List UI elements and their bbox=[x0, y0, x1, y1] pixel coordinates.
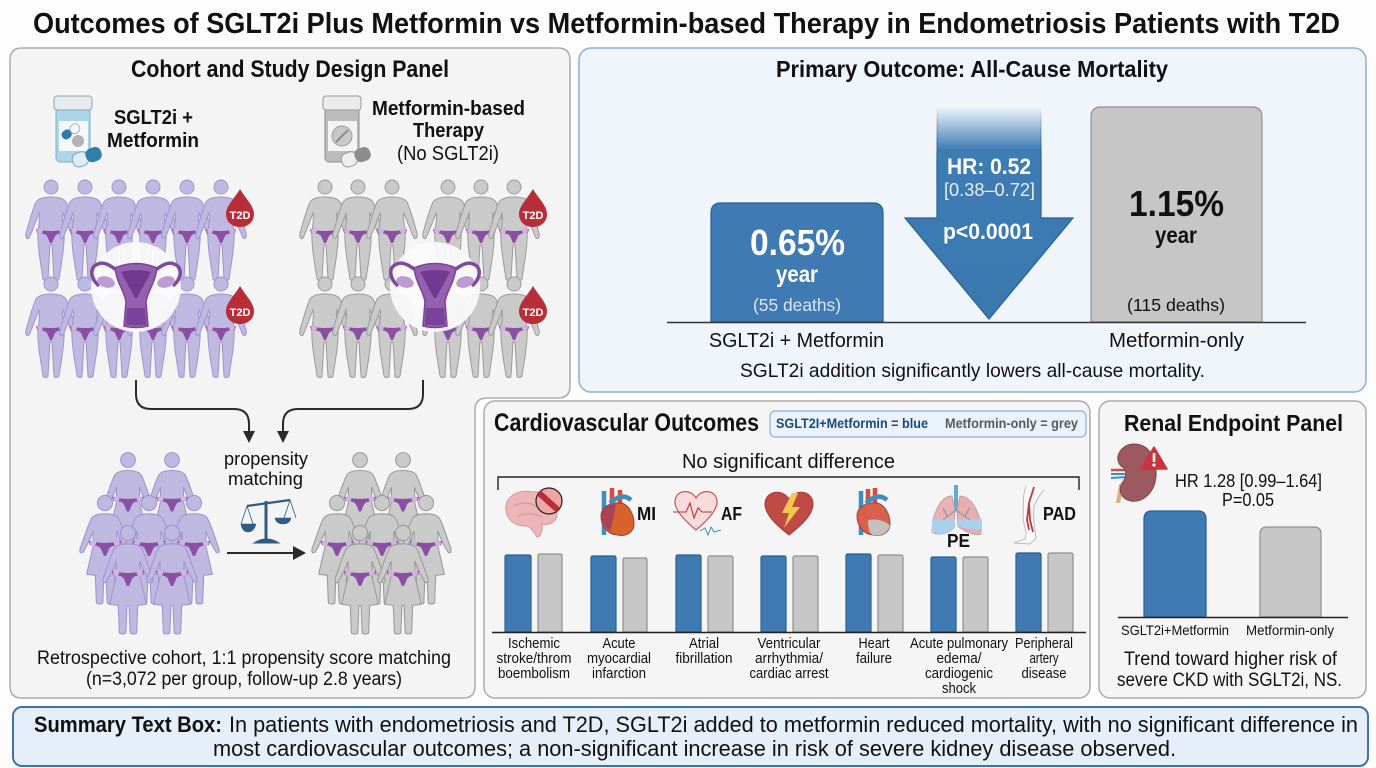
label: SGLT2i + Metformin: Metformin bbox=[107, 130, 199, 152]
icon: metformin pill bottle bbox=[323, 96, 372, 169]
arrow: left cohort to matching bbox=[136, 380, 255, 443]
icon: T2D drop bbox=[519, 286, 547, 324]
icon: heart AF bbox=[673, 492, 721, 535]
icon: T2D drop bbox=[226, 286, 254, 324]
bar: SGLT2i plus metformin: year bbox=[776, 261, 818, 287]
bar: SGLT2i plus metformin: (55 deaths) bbox=[753, 295, 841, 315]
labels: cardiovascular categories: Acute bbox=[602, 636, 636, 652]
label: SGLT2i + Metformin: SGLT2i + bbox=[114, 107, 193, 129]
labels: cardiovascular categories: stroke/throm bbox=[496, 651, 572, 667]
bar: metformin only bbox=[1091, 107, 1262, 322]
labels: cardiovascular categories: shock bbox=[942, 681, 977, 697]
label: propensity matching bbox=[224, 448, 309, 489]
label: PAD: PAD bbox=[1043, 504, 1076, 524]
label: SGLT2i + Metformin axis: SGLT2i + Metformin bbox=[709, 329, 884, 352]
icon: leg artery bbox=[1014, 486, 1044, 544]
heading: renal: Renal Endpoint Panel bbox=[1124, 410, 1343, 436]
icon: heart with lightning bbox=[765, 492, 813, 535]
labels: cardiovascular categories: myocardial bbox=[587, 651, 651, 667]
labels: cardiovascular categories: Acute pulmonary bbox=[910, 636, 1009, 652]
label: Metformin-based Therapy: Therapy bbox=[413, 120, 485, 142]
labels: cardiovascular categories: cardiogenic bbox=[925, 666, 993, 682]
label: propensity matching: propensity bbox=[224, 448, 309, 469]
labels: cardiovascular categories: edema/ bbox=[936, 651, 982, 667]
text: renal conclusion: Trend toward higher risk of bbox=[1124, 649, 1338, 670]
text: cohort description: (n=3,072 per group, follow-up 2.8 years) bbox=[86, 669, 402, 690]
text: renal hazard ratio bbox=[1175, 471, 1322, 510]
labels: cardiovascular categories: Peripheral bbox=[1015, 636, 1073, 652]
panel: cohort and study design bbox=[10, 48, 570, 698]
label: PE: PE bbox=[947, 531, 970, 551]
labels: cardiovascular categories: boembolism bbox=[498, 666, 570, 682]
chart: renal bars bbox=[1118, 511, 1348, 618]
panel: summary text box bbox=[13, 707, 1368, 766]
group: matched metformin patients bbox=[312, 453, 451, 634]
panel: summary text box: most cardiovascular outcomes; a non-significant increase in risk of severe kidney disease observed. bbox=[213, 736, 1176, 761]
heading: cohort panel: Cohort and Study Design Panel bbox=[131, 56, 449, 83]
text: cohort description bbox=[37, 648, 451, 690]
icon: balance scale bbox=[241, 500, 296, 543]
bar: metformin only: 1.15% bbox=[1129, 183, 1224, 224]
panel: cardiovascular outcomes bbox=[484, 401, 1090, 698]
bar: metformin only: (115 deaths) bbox=[1127, 295, 1225, 315]
labels: cardiovascular categories: artery bbox=[1030, 651, 1059, 667]
legend: SGLT2I+Metformin = blue bbox=[776, 415, 928, 431]
icon: uterus bbox=[91, 242, 181, 332]
label: AF: AF bbox=[721, 504, 742, 524]
arrow: right cohort to matching bbox=[277, 380, 423, 443]
bar: SGLT2i plus metformin: 0.65% bbox=[750, 222, 845, 263]
panel: renal endpoint bbox=[1099, 401, 1366, 698]
arrow: matching bbox=[227, 546, 306, 560]
panel: summary text box: In patients with endometriosis and T2D, SGLT2i added to metformin reduced mortality, with no significant difference in bbox=[229, 712, 1358, 737]
chart: cardiovascular bars bbox=[492, 553, 1086, 632]
label: Metformin-based Therapy bbox=[372, 98, 525, 165]
text: no significant difference: No significant difference bbox=[682, 450, 895, 473]
group: metformin cohort people bbox=[300, 180, 539, 378]
arrow: hazard ratio: p<0.0001 bbox=[943, 219, 1033, 244]
label: propensity matching: matching bbox=[228, 468, 303, 489]
legend: Metformin-only = grey bbox=[945, 415, 1078, 431]
labels: cardiovascular categories: Ventricular bbox=[758, 636, 821, 652]
labels: cardiovascular categories: failure bbox=[856, 651, 892, 667]
icon: lungs bbox=[932, 485, 982, 535]
labels: cardiovascular categories: Heart bbox=[858, 636, 890, 652]
text: renal hazard ratio: HR 1.28 [0.99–1.64] bbox=[1175, 471, 1322, 491]
icon: T2D drop bbox=[519, 189, 547, 227]
icon: heart failure bbox=[857, 488, 890, 536]
labels: cardiovascular categories: Ischemic bbox=[508, 636, 560, 652]
label: Metformin-based Therapy: (No SGLT2i) bbox=[397, 143, 499, 165]
text: renal hazard ratio: P=0.05 bbox=[1222, 490, 1274, 510]
text: primary conclusion: SGLT2i addition significantly lowers all-cause mortality. bbox=[740, 360, 1205, 382]
labels: cardiovascular categories: infarction bbox=[592, 666, 646, 682]
arrow: hazard ratio bbox=[905, 107, 1073, 319]
panel: summary text box: Summary Text Box: bbox=[34, 712, 222, 737]
arrow: hazard ratio: [0.38–0.72] bbox=[944, 179, 1035, 200]
icon: SGLT2i pill bottle bbox=[54, 96, 103, 169]
label: Metformin-only axis: Metformin-only bbox=[1109, 329, 1245, 352]
icon: T2D drop bbox=[226, 189, 254, 227]
heading: primary outcome: Primary Outcome: All-Cause Mortality bbox=[776, 56, 1168, 82]
text: cohort description: Retrospective cohort, 1:1 propensity score matching bbox=[37, 648, 451, 669]
label: Metformin-based Therapy: Metformin-based bbox=[372, 98, 525, 120]
group: matched SGLT2i patients bbox=[80, 453, 219, 634]
arrow: hazard ratio: HR: 0.52 bbox=[947, 154, 1031, 179]
labels: cardiovascular categories: disease bbox=[1022, 666, 1066, 682]
labels: cardiovascular categories: Atrial bbox=[689, 636, 719, 652]
icon: uterus bbox=[390, 242, 480, 332]
text: renal conclusion: severe CKD with SGLT2i, NS. bbox=[1117, 670, 1342, 691]
label: renal SGLT2i+Metformin: SGLT2i+Metformin bbox=[1121, 622, 1229, 638]
group: SGLT2i cohort people bbox=[26, 180, 246, 378]
panel: primary outcome bbox=[579, 48, 1366, 392]
labels: cardiovascular categories bbox=[496, 636, 1073, 697]
label: renal Metformin-only: Metformin-only bbox=[1246, 622, 1334, 638]
text: renal conclusion bbox=[1117, 649, 1342, 691]
bar: SGLT2i plus metformin bbox=[711, 203, 883, 322]
labels: cardiovascular categories: arrhythmia/ bbox=[755, 651, 824, 667]
heading: cardiovascular: Cardiovascular Outcomes bbox=[494, 409, 759, 437]
labels: cardiovascular categories: cardiac arrest bbox=[750, 666, 828, 682]
legend bbox=[770, 411, 1086, 437]
label: MI: MI bbox=[637, 504, 656, 524]
bar: metformin only: year bbox=[1155, 222, 1197, 248]
label: SGLT2i + Metformin bbox=[107, 107, 199, 152]
icon: kidney with warning bbox=[1111, 444, 1167, 503]
icon: brain with clot bbox=[506, 488, 562, 537]
labels: cardiovascular categories: fibrillation bbox=[676, 651, 732, 667]
icon: heart MI bbox=[601, 488, 634, 535]
